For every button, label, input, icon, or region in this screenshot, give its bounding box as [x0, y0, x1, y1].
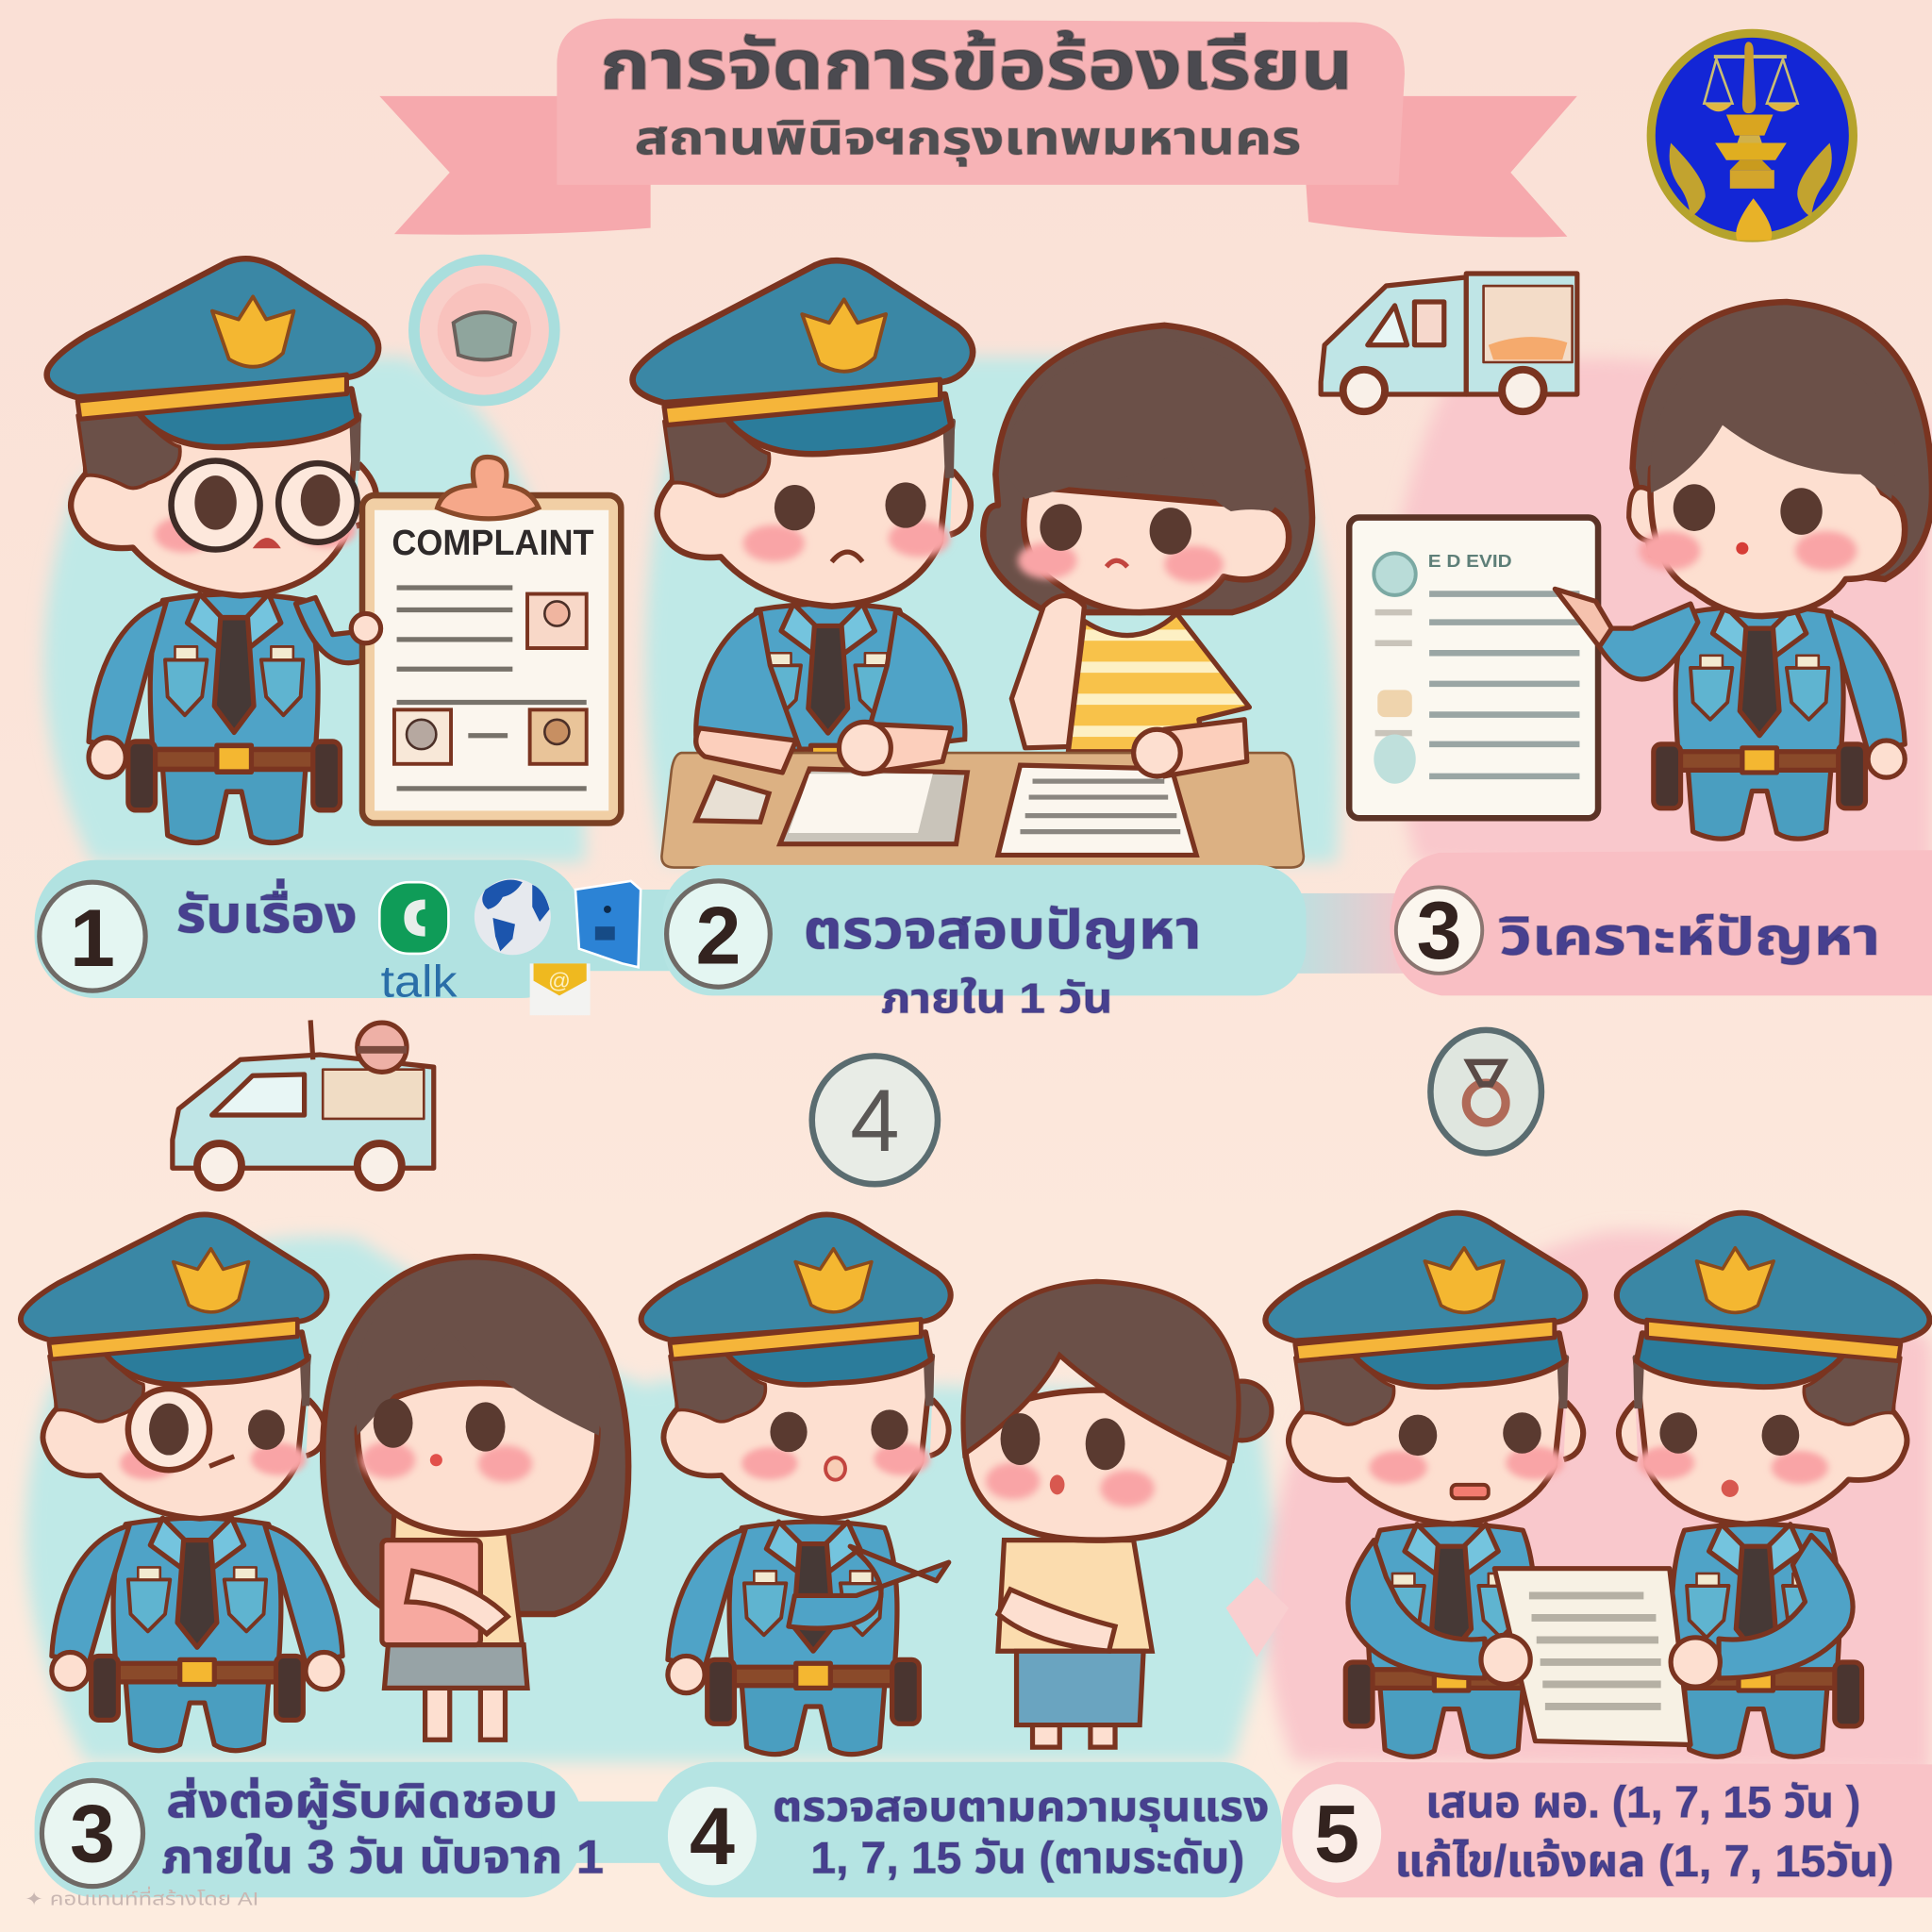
panel: step 1 officer with complaint clipboard: [47, 258, 621, 842]
icon: green talk app: [379, 882, 458, 1007]
label pills row one: [35, 850, 1932, 998]
number badge 3: [1396, 886, 1482, 976]
title ribbon: [379, 19, 1577, 237]
number badge 1: 1: [70, 893, 115, 984]
text: within 1 day: ภายใน 1 วัน: [881, 976, 1112, 1023]
citizen with striped shirt: [983, 325, 1312, 752]
number badge 3: 3: [70, 1790, 115, 1880]
number badge 4 outline: [812, 1056, 938, 1184]
background blobs: [25, 358, 1932, 1774]
step 2 label: [667, 881, 1201, 1023]
icon: circular hat badge: [414, 260, 555, 400]
lower step 3 label: [42, 1775, 604, 1887]
officer pointing: [641, 1214, 951, 1755]
number badge 4 outline: 4: [850, 1071, 899, 1170]
document: E D EVID: [1428, 551, 1512, 571]
number badge 2: 2: [696, 891, 741, 981]
icon: email envelope: @: [548, 969, 571, 993]
logo: emblem: [1651, 33, 1853, 241]
clipboard with complaint form: COMPLAINT: [391, 524, 594, 563]
lower step 5 label: [1292, 1777, 1894, 1886]
woman with pink book: [323, 1257, 628, 1740]
connector diamond: [1226, 1577, 1289, 1657]
text: inspect problem: ตรวจสอบปัญหา: [804, 901, 1201, 961]
document: [1349, 518, 1598, 818]
icon: globe: [475, 878, 551, 955]
panel: step 4 severity check: [641, 1056, 1272, 1755]
clipboard with complaint form: [351, 458, 621, 823]
step 1 label: [40, 878, 641, 1015]
number badge 5: [1292, 1784, 1381, 1883]
child with crossed arms: [963, 1281, 1272, 1747]
officer left: [1265, 1213, 1585, 1757]
document held by officers: [1348, 1535, 1853, 1744]
officer pointing arm: [1599, 604, 1698, 679]
panel: step 3 officer with document and truck: [1321, 274, 1932, 839]
panel: lower step 3 forwarding: [21, 1020, 628, 1751]
officer figure: [633, 260, 973, 837]
officer right: [1617, 1213, 1930, 1757]
number badge 4: [668, 1787, 757, 1885]
text: fix and notify: แก้ไข/แจ้งผล (1, 7, 15วัน): [1395, 1836, 1894, 1886]
lower step 4 label: [668, 1784, 1269, 1885]
text: analyse problem: วิเคราะห์ปัญหา: [1499, 908, 1880, 966]
number badge 2: [667, 881, 770, 987]
step 3 label: [1396, 886, 1880, 976]
number badge 4: 4: [690, 1791, 735, 1882]
text: receive complaint: รับเรื่อง: [176, 879, 358, 944]
text: check by severity: ตรวจสอบตามความรุนแรง: [773, 1784, 1269, 1832]
desk with papers: [661, 720, 1304, 868]
panel: step 5 report to director: [1265, 1030, 1930, 1757]
subtitle: สถานพินิจฯกรุงเทพมหานคร: [635, 111, 1301, 166]
title: การจัดการข้อร้องเรียน: [600, 27, 1353, 104]
icon: email envelope: [530, 963, 591, 1015]
officer pointing hand: [1555, 589, 1611, 647]
number badge 3: 3: [1417, 886, 1462, 976]
number badge 1: [40, 882, 145, 991]
outlined badge with odd numeral: [1430, 1030, 1541, 1154]
icon: green talk app: talk: [381, 957, 458, 1007]
icon: blue complaint box: [575, 881, 641, 967]
number badge 3: [42, 1780, 143, 1887]
text: within 3 days: ภายใน 3 วัน นับจาก 1: [161, 1830, 604, 1883]
label pills row two: [35, 1762, 1932, 1897]
panel: step 2 officer and citizen at desk: [633, 260, 1312, 868]
icon: truck: [1321, 274, 1577, 411]
officer with magnifier: [21, 1214, 342, 1751]
icon: police van: [173, 1020, 434, 1188]
watermark: ✦ คอนเทนท์ที่สร้างโดย AI: [25, 1886, 258, 1909]
officer figure: [47, 258, 378, 842]
text: forward to responsible person: ส่งต่อผู้รับผิดชอบ: [166, 1775, 558, 1830]
number badge 5: 5: [1314, 1790, 1359, 1880]
text: propose to director: เสนอ ผอ. (1, 7, 15 วัน ): [1425, 1777, 1860, 1827]
officer figure with dark hair: [1629, 302, 1932, 839]
text: 1, 7, 15 days: 1, 7, 15 วัน (ตามระดับ): [810, 1832, 1244, 1882]
